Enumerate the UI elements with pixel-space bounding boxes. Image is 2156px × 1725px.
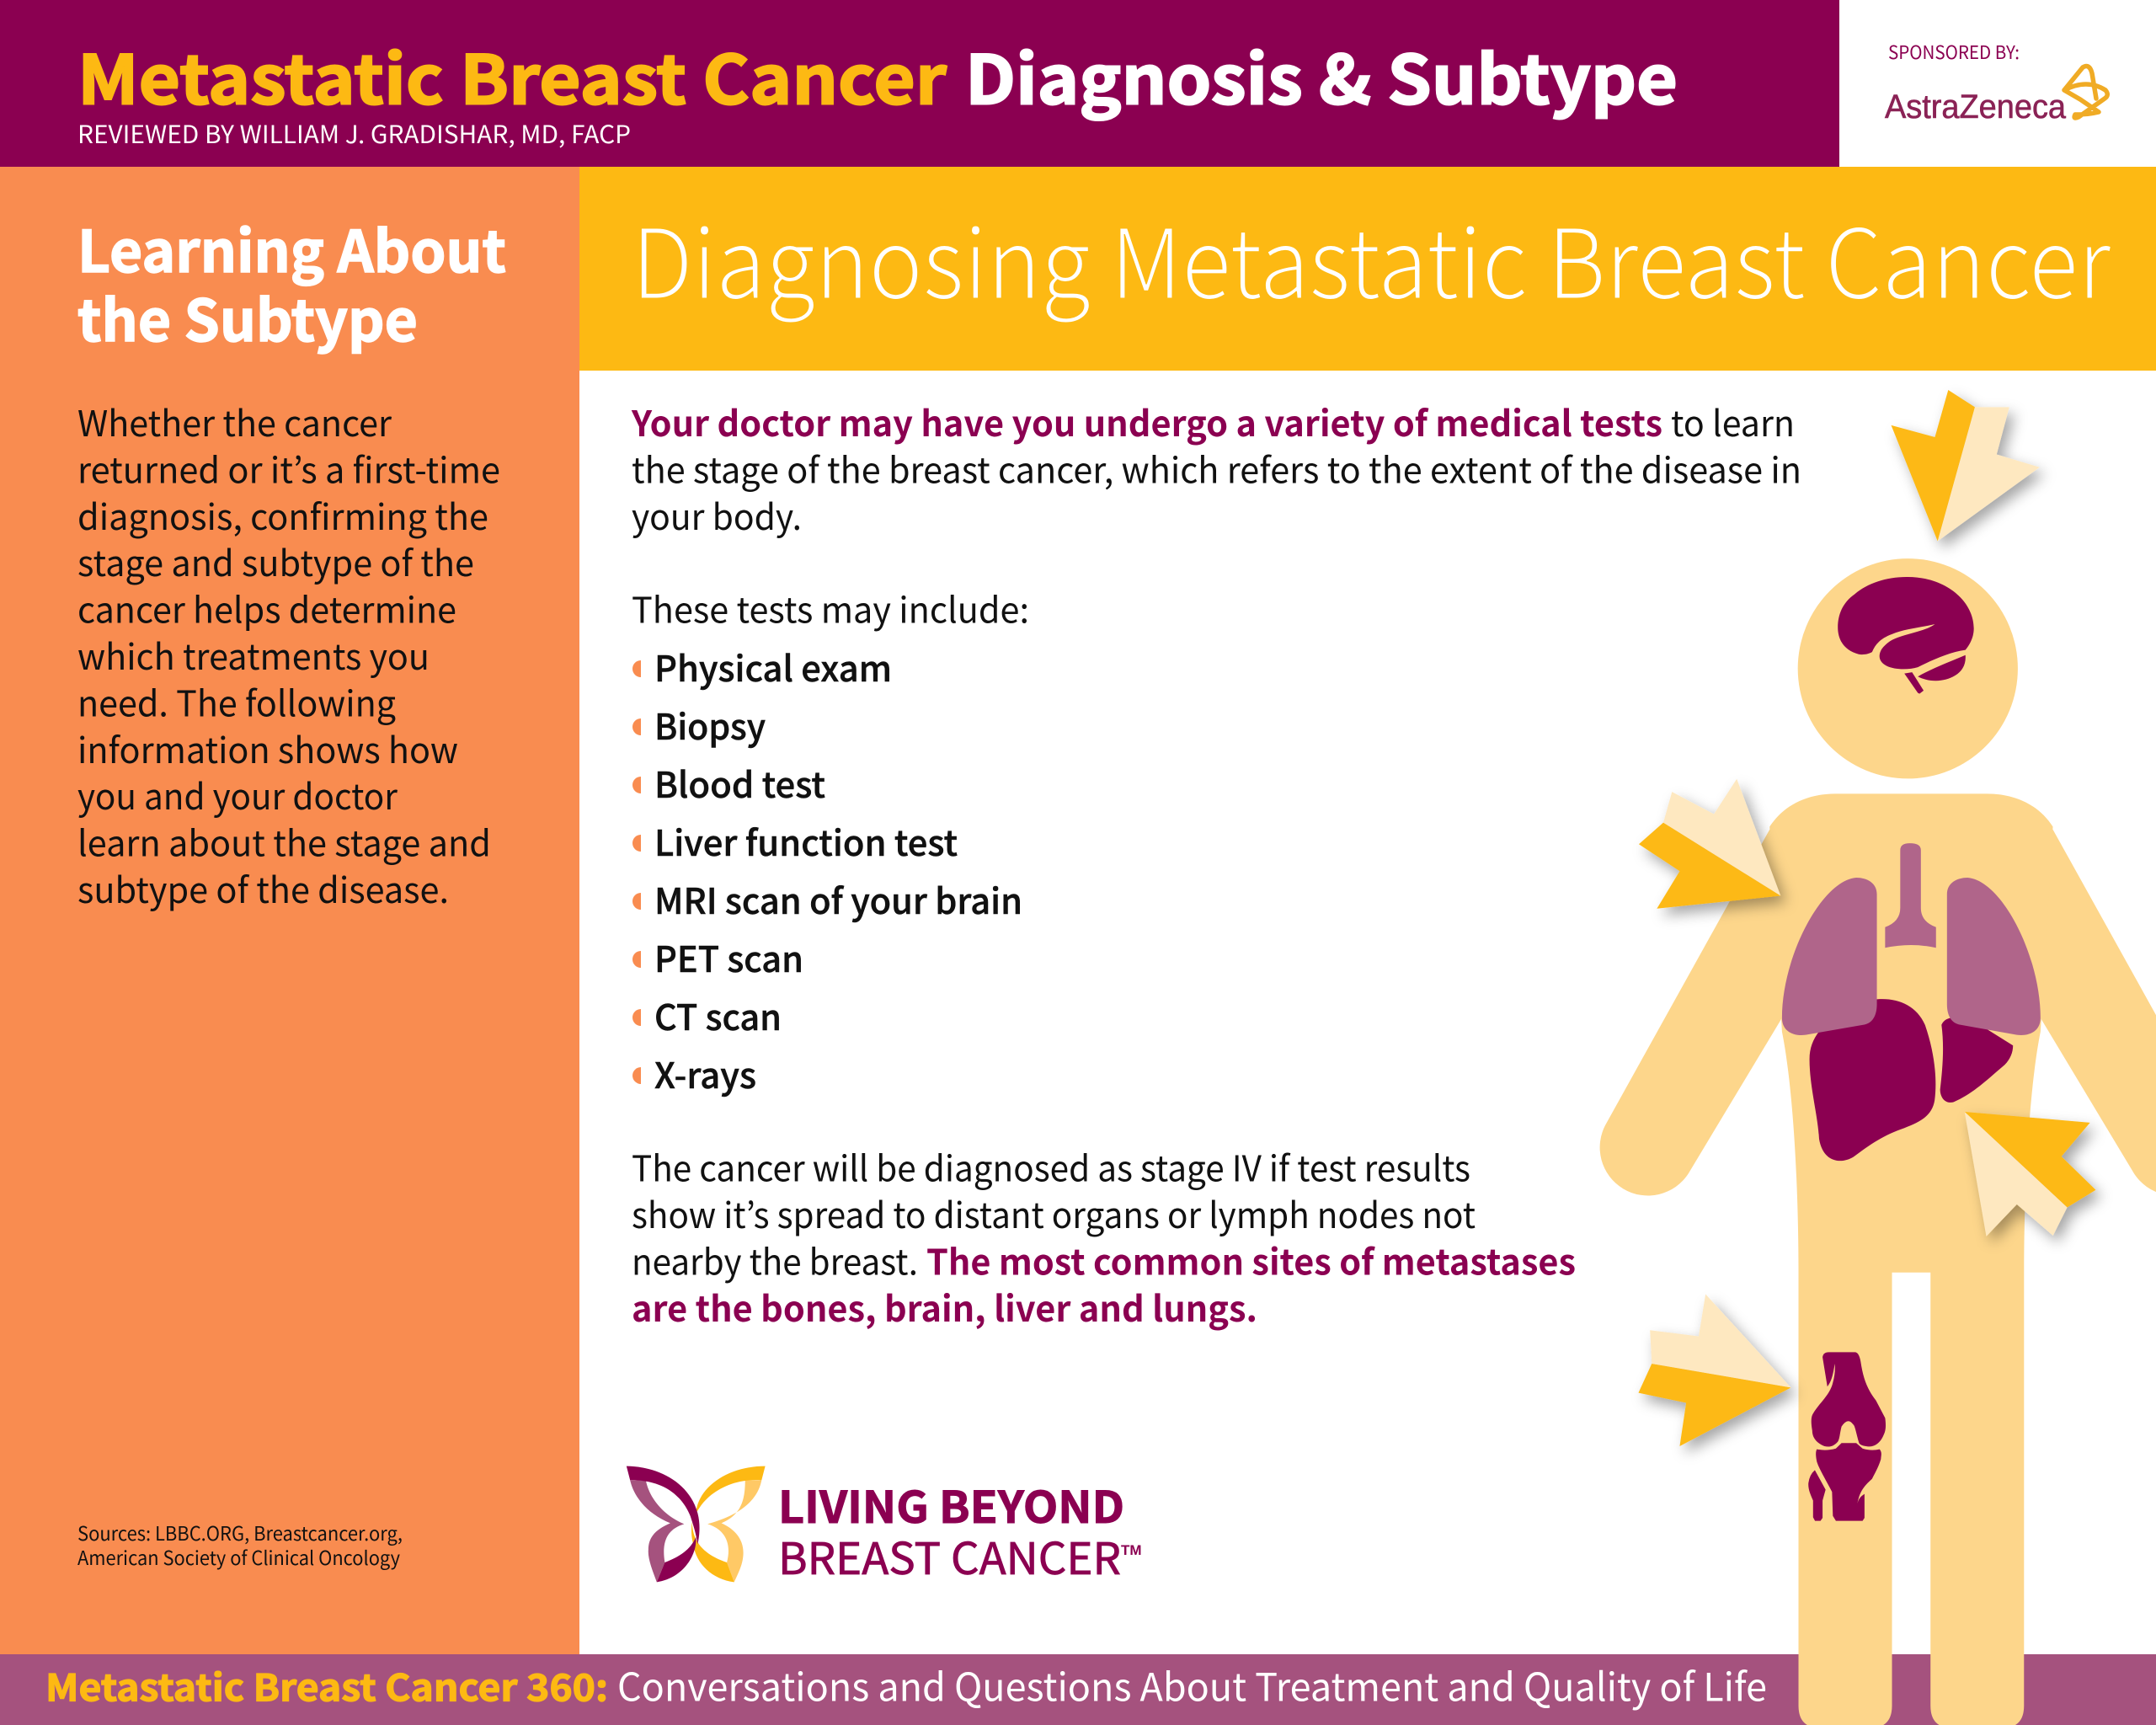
list of tests: X-rays [654,1048,756,1099]
intro paragraph: your body. [632,489,802,541]
stage IV paragraph: The most common sites of metastases [926,1235,1576,1285]
list of tests: Biopsy [654,699,766,750]
sidebar text [77,396,500,914]
arrow: to bone [1638,1295,1791,1446]
body silhouette [1600,558,2156,1725]
icon: brain [1838,577,1974,694]
footer bar [0,1654,2156,1725]
sidebar text: which treatments you [77,629,430,681]
title [77,27,1678,125]
sidebar text: you and your doctor [77,769,398,820]
sidebar text: cancer helps determine [77,583,456,634]
stage IV paragraph: are the bones, brain, liver and lungs. [632,1281,1257,1332]
sources: Sources: LBBC.ORG, Breastcancer.org, [77,1518,403,1546]
logo wordmark: LIVING BEYOND [778,1472,1124,1535]
stage IV paragraph: show it’s spread to distant organs or lymph nodes not [632,1188,1476,1239]
icon: knee bones [1808,1352,1886,1521]
intro paragraph [631,396,1801,541]
figure: human body [1600,558,2156,1725]
footer bar: Metastatic Breast Cancer 360: [45,1658,608,1712]
list of tests [632,641,1022,1099]
icon: butterfly [627,1466,766,1582]
logo wordmark [778,1472,1142,1587]
sponsor block [1885,38,2107,126]
arrow: to lung [1639,779,1780,909]
stage IV paragraph: nearby the breast. [632,1235,918,1285]
icon: lungs [1782,843,2041,1035]
list of tests: Physical exam [654,641,892,692]
list of tests: PET scan [654,932,803,983]
sidebar text: subtype of the disease. [77,862,449,914]
sidebar text: Whether the cancer [77,396,392,447]
sponsor block: SPONSORED BY: [1888,38,2020,65]
stage IV paragraph: The cancer will be diagnosed as stage IV if test results [632,1140,1470,1193]
LBBC logo [627,1466,1142,1587]
sidebar text: need. The following [77,676,396,727]
sidebar text: stage and subtype of the [77,536,474,587]
list of tests: Blood test [654,757,825,809]
logo wordmark: TM [1121,1542,1142,1558]
sidebar text: learn about the stage and [77,816,491,868]
reviewer line: REVIEWED BY WILLIAM J. GRADISHAR, MD, FACP [77,115,631,151]
intro paragraph: Your doctor may have you undergo a variety of medical tests [631,396,1662,447]
header banner [0,0,1839,167]
panel: learning about the subtype [0,167,579,1654]
sources [77,1518,403,1571]
sidebar heading: the Subtype [77,275,418,358]
intro paragraph: to learn [1671,396,1795,447]
title: Metastatic Breast Cancer [77,27,947,125]
sidebar text: information shows how [77,723,458,774]
arrow: to liver [1965,1112,2095,1236]
AstraZeneca logo [1885,67,2107,126]
section heading band: Diagnosing Metastatic Breast Cancer [632,187,2111,326]
intro paragraph: the stage of the breast cancer, which refers to the extent of the disease in [632,442,1801,494]
list of tests: MRI scan of your brain [654,873,1022,925]
list of tests: CT scan [654,990,782,1041]
title: Diagnosis & Subtype [965,27,1678,125]
AstraZeneca logo: AstraZeneca [1885,88,2067,126]
sidebar text: diagnosis, confirming the [77,489,488,541]
section heading band [579,167,2156,371]
sidebar text: returned or it’s a first-time [77,442,500,494]
sidebar heading: Learning About [77,206,506,289]
logo wordmark: BREAST CANCER [778,1524,1121,1587]
footer bar: Conversations and Questions About Treatment and Quality of Life [617,1658,1767,1713]
list intro: These tests may include: [632,583,1029,634]
icon: liver [1810,999,2013,1161]
arrows [1638,390,2095,1446]
arrow: to brain [1892,390,2040,542]
sources: American Society of Clinical Oncology [77,1542,400,1571]
sidebar heading [77,206,506,358]
stage IV paragraph [632,1140,1576,1332]
list of tests: Liver function test [654,815,958,867]
